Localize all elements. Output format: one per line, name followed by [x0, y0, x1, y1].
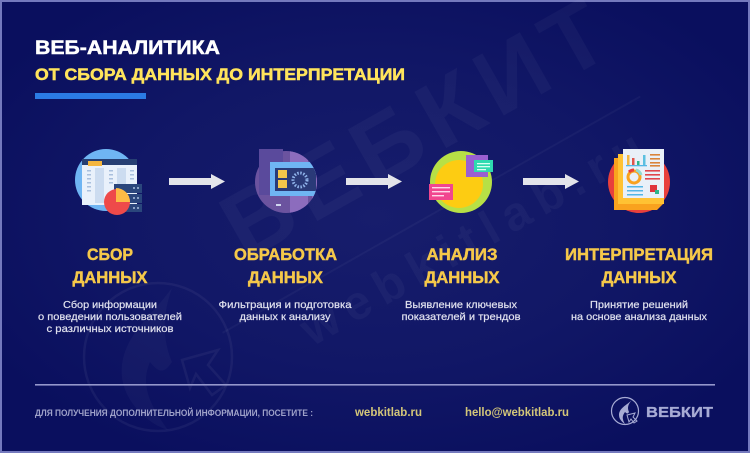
icon: interpretation report: [608, 149, 670, 213]
step 2 heading: ДАННЫХ: [248, 269, 323, 287]
step 4 heading: [565, 246, 713, 287]
footer email: hello@webkitlab.ru: [465, 407, 569, 419]
subtitle: ОТ СБОРА ДАННЫХ ДО ИНТЕРПРЕТАЦИИ: [35, 65, 405, 84]
step 3 heading: [424, 246, 500, 287]
step 4 description: Принятие решений: [590, 299, 688, 311]
arrow 2: [346, 174, 402, 189]
step 1 heading: ДАННЫХ: [72, 269, 148, 287]
step 4 heading: ДАННЫХ: [602, 269, 676, 287]
footer logo: ВЕБКИТ: [646, 405, 713, 421]
title: ВЕБ-АНАЛИТИКА: [35, 38, 220, 59]
step 1 heading: [72, 246, 148, 287]
step 4 heading: ИНТЕРПРЕТАЦИЯ: [565, 246, 713, 264]
step 3 heading: ДАННЫХ: [424, 269, 500, 287]
step 1 description: [38, 299, 182, 335]
step 2 description: данных к анализу: [240, 311, 331, 323]
footer website: webkitlab.ru: [354, 407, 422, 419]
icon: analysis pie chart: [429, 151, 493, 213]
footer divider: [35, 384, 715, 386]
step 2 heading: ОБРАБОТКА: [234, 246, 337, 264]
arrow 1: [169, 174, 225, 189]
footer note: ДЛЯ ПОЛУЧЕНИЯ ДОПОЛНИТЕЛЬНОЙ ИНФОРМАЦИИ, ПОСЕТИТЕ :: [35, 407, 313, 419]
step 3 description: Выявление ключевых: [405, 299, 518, 311]
icon: data collection table: [75, 149, 142, 215]
step 1 heading: СБОР: [87, 246, 133, 264]
step 2 heading: [234, 246, 337, 287]
step 3 heading: АНАЛИЗ: [426, 246, 498, 264]
step 1 description: о поведении пользователей: [38, 311, 182, 323]
step 1 description: с различных источников: [46, 323, 174, 335]
watermark: brand name, domain and logo: [84, 0, 653, 431]
step 3 description: показателей и трендов: [402, 311, 521, 323]
footer logo: [612, 398, 713, 424]
step 2 description: [218, 299, 352, 323]
icon: data processing window: [255, 149, 320, 214]
step 2 description: Фильтрация и подготовка: [218, 299, 352, 311]
arrow 3: [523, 174, 579, 189]
title accent bar: [35, 93, 146, 99]
watermark: brand name, domain and logo: webkitlab.ru: [290, 121, 653, 357]
step 3 description: [402, 299, 521, 323]
step 4 description: на основе анализа данных: [571, 311, 708, 323]
step 1 description: Сбор информации: [63, 299, 157, 311]
step 4 description: [571, 299, 708, 323]
